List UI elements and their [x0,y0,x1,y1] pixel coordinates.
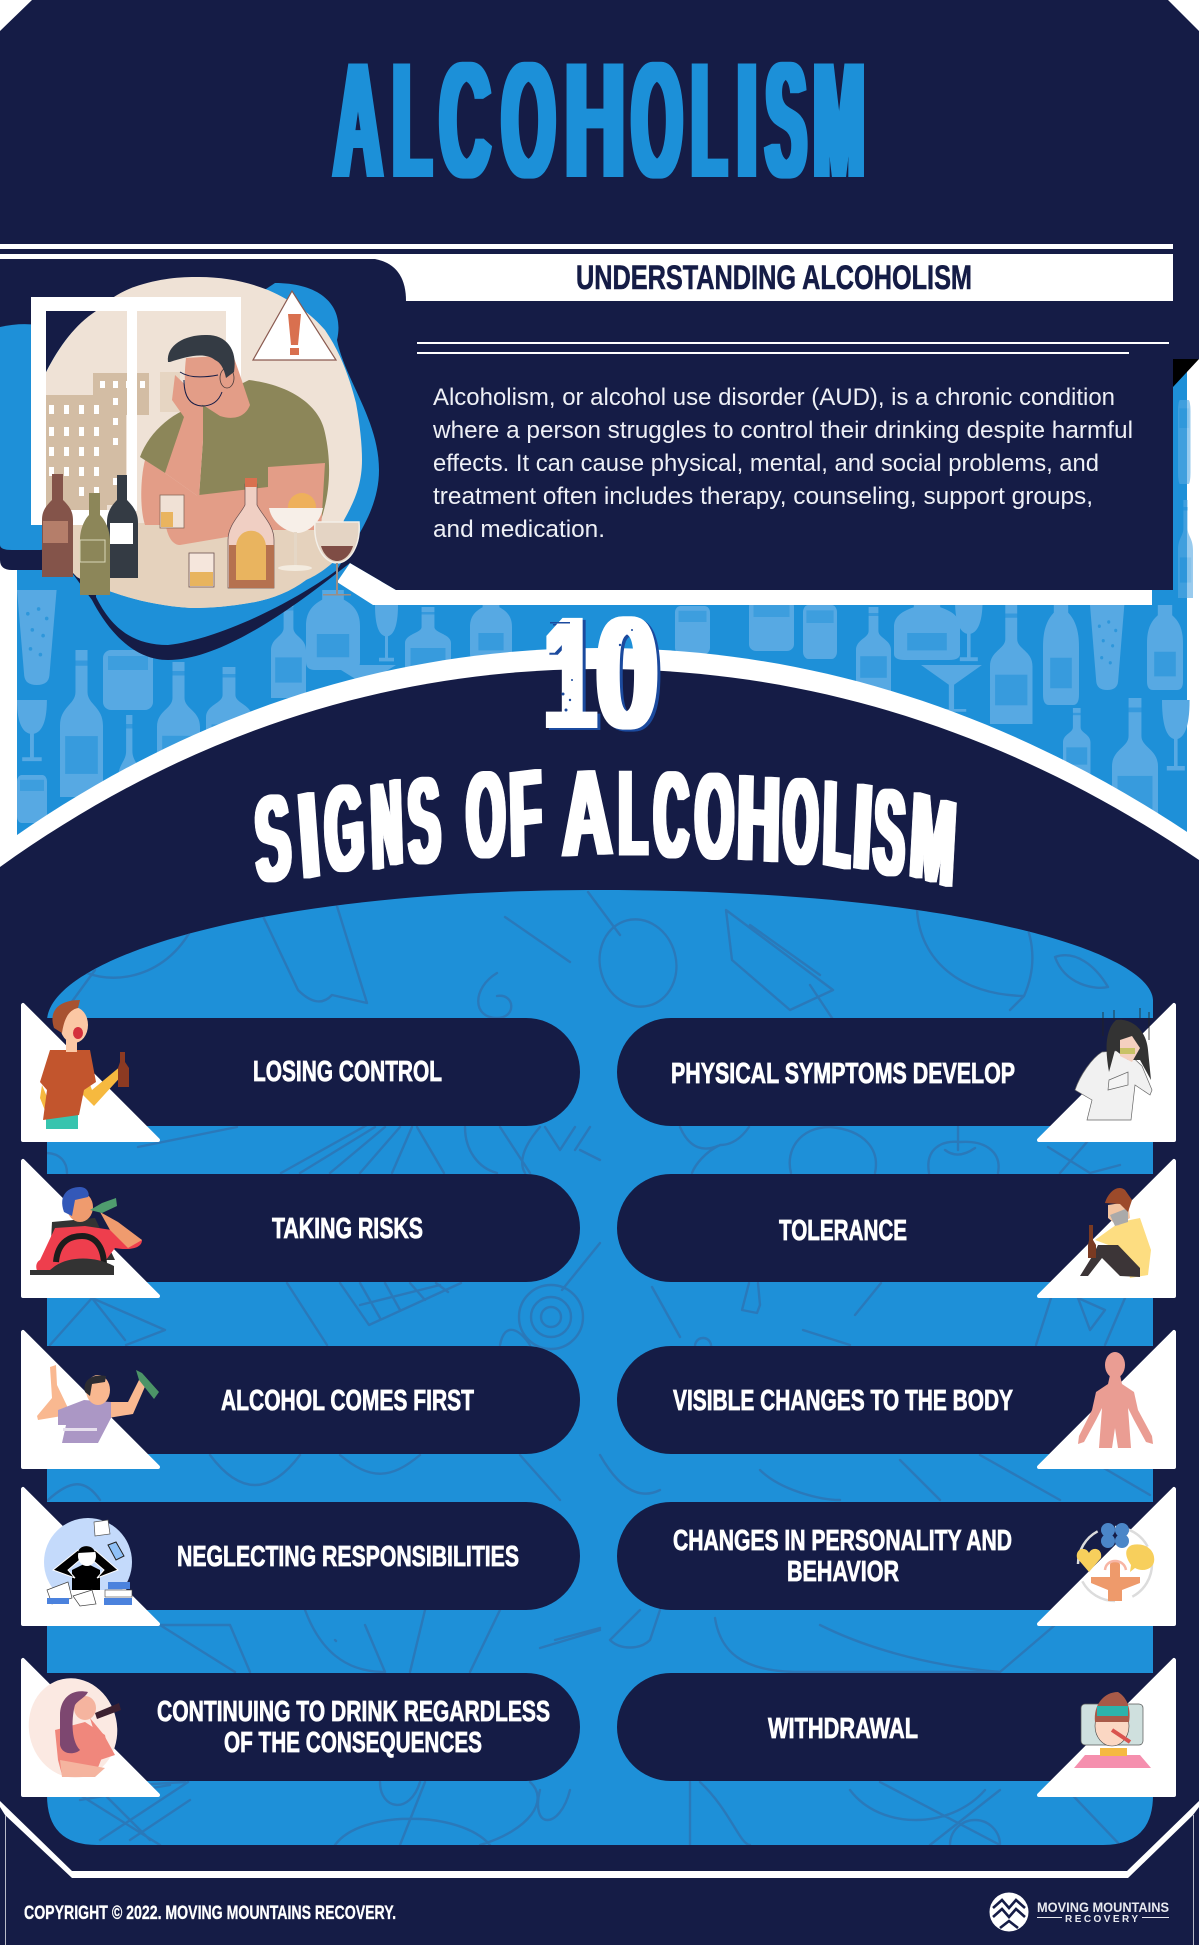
heading: signs of alcoholism: C [654,746,690,883]
icon: stressed person at desk [44,1518,132,1606]
curved navy arch with white border [0,648,1199,1945]
icon: driver drinking [30,1187,142,1275]
heading: signs of alcoholism: L [619,745,647,881]
heading: signs of alcoholism: N [363,758,405,896]
header divider lines and white heading band [0,244,1173,330]
icon: personality wheel [1077,1523,1154,1601]
footer copyright: COPYRIGHT © 2022. MOVING MOUNTAINS RECOVERY. [24,1903,396,1924]
intro paragraph: treatment often includes therapy, counseling, support groups, [433,483,1093,510]
sign 10: withdrawal: WITHDRAWAL [768,1713,918,1745]
number 10: 0 [596,583,658,762]
intro paragraph [432,384,1133,543]
sign 4: neglecting responsibilities: NEGLECTING RESPONSIBILITIES [177,1541,519,1573]
icon: sick person in bed [1074,1692,1151,1768]
sign 8: visible changes to the body [617,1332,1174,1467]
sign 2: taking risks [23,1161,580,1296]
title: I [737,28,757,212]
sign 9: changes in personality and behavior: CHANGES IN PERSONALITY AND [673,1525,1012,1557]
heading: signs of alcoholism: H [736,749,783,886]
sign 5: continuing to drink: CONTINUING TO DRINK REGARDLESS [157,1696,550,1728]
logo: moving mountains recovery: RECOVERY [1065,1914,1138,1925]
background panel: bottle pattern [17,359,1193,889]
sign 3: alcohol comes first: ALCOHOL COMES FIRST [221,1385,474,1417]
heading: signs of alcoholism: O [782,751,823,889]
sign 8: visible changes to the body: VISIBLE CHANGES TO THE BODY [673,1385,1013,1417]
heading: signs of alcoholism: S [245,772,295,911]
illustration: man drinking at a table [0,277,379,645]
black corner triangle [1173,359,1199,387]
bottom white frame stripe [0,1801,1199,1945]
text: M [814,28,864,212]
intro rule lines [417,342,1169,354]
logo: moving mountains recovery: MOVING MOUNTAINS [1037,1899,1169,1915]
sign 9: changes in personality and behavior: BEHAVIOR [787,1556,899,1588]
sign 5: continuing to drink: OF THE CONSEQUENCES [224,1727,482,1759]
heading: signs of alcoholism: L [821,754,857,892]
title: O [632,28,682,212]
title [334,28,864,212]
intro paragraph: and medication. [433,516,605,543]
sign 7: tolerance: TOLERANCE [779,1215,907,1247]
logo: moving mountains recovery [990,1892,1169,1932]
white strip below intro panel [337,563,1152,605]
heading: signs of alcoholism: I [850,757,880,894]
sign 1: losing control [23,1000,580,1140]
heading: understanding alcoholism: UNDERSTANDING ALCOHOLISM [576,259,972,297]
sign 9: changes in personality and behavior [617,1489,1174,1624]
sign 6: physical symptoms develop [617,1005,1174,1140]
sign 10: withdrawal [617,1660,1174,1795]
heading: signs of alcoholism: F [505,746,543,883]
sign 3: alcohol comes first [23,1332,580,1467]
number 10: 1 [544,583,596,762]
title: C [440,28,490,212]
title: A [334,28,382,212]
heading: signs of alcoholism: G [316,762,368,901]
title: L [393,28,431,212]
intro paragraph: where a person struggles to control their drinking despite harmful [432,417,1133,444]
title: O [502,28,555,212]
sign 7: tolerance [617,1161,1174,1296]
sign 5: continuing to drink [20,1660,580,1795]
heading: signs of alcoholism: S [870,761,914,899]
icon: warning triangle [253,291,336,360]
title: H [565,28,625,212]
heading: signs of alcoholism [245,745,966,911]
sign 4: neglecting responsibilities [23,1489,580,1624]
icon: man with bottle [40,1000,129,1129]
title: S [766,28,806,212]
heading: signs of alcoholism: O [694,747,736,884]
heading: signs of alcoholism: M [906,766,966,906]
icon: sad man sitting [1080,1188,1151,1278]
heading: signs of alcoholism: I [289,767,325,905]
heading: signs of alcoholism: S [400,754,443,892]
heading: signs of alcoholism: O [460,748,508,886]
intro paragraph: effects. It can cause physical, mental, and social problems, and [433,450,1099,477]
icon: cheering man [37,1365,159,1443]
intro paragraph: Alcoholism, or alcohol use disorder (AUD), is a chronic condition [433,384,1115,411]
panel: top navy header and intro panel [0,0,1199,660]
heading: signs of alcoholism: A [560,745,613,882]
title: L [692,28,726,212]
sign 6: physical symptoms develop: PHYSICAL SYMPTOMS DEVELOP [671,1058,1015,1090]
icon: sick woman [1075,1008,1152,1120]
sign 1: losing control: LOSING CONTROL [253,1056,442,1088]
sign 2: taking risks: TAKING RISKS [272,1213,423,1245]
icon: woman drinking [20,1670,126,1786]
icon: body silhouette [1078,1352,1153,1448]
panel: blue signs background with line-art [46,890,1153,1845]
